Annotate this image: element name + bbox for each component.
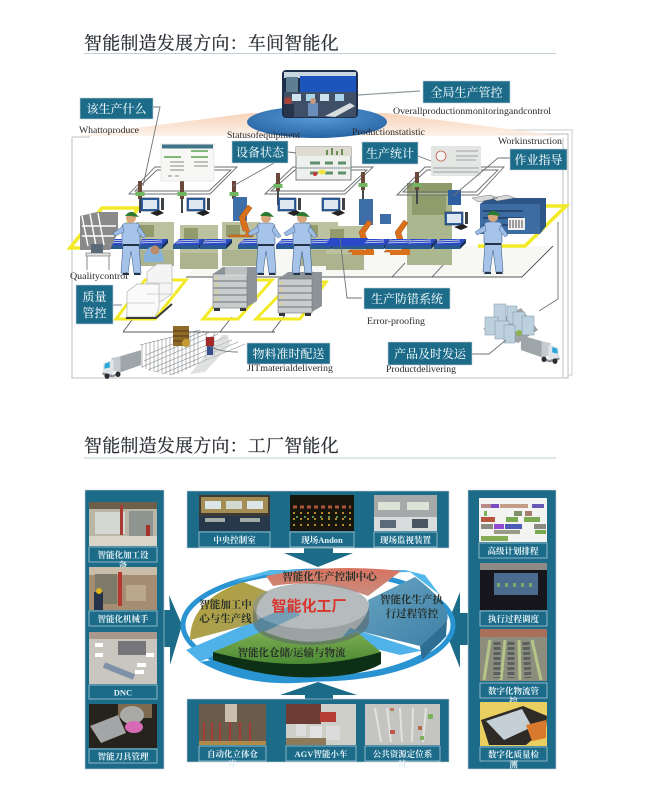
label: central control room: 中央控制室 xyxy=(213,535,256,545)
factory line artwork xyxy=(70,167,566,375)
panel: right planning xyxy=(468,490,556,770)
photo: site monitoring xyxy=(374,495,437,531)
caption: product delivering: Productdelivering xyxy=(386,365,456,375)
photo: machining equipment xyxy=(89,502,157,546)
photo: robot arm xyxy=(89,567,157,610)
segment: warehouse and logistics xyxy=(213,631,381,677)
label: logistics management: 控 xyxy=(509,696,518,706)
machine towers xyxy=(233,197,247,221)
arrow: bottom panel to centre xyxy=(280,682,357,700)
label: machining centre xyxy=(199,598,252,625)
material handler xyxy=(206,337,214,346)
callout: equipment status xyxy=(232,141,288,163)
inner light-blue bands xyxy=(186,570,450,683)
label: advanced scheduling xyxy=(479,543,547,558)
delivery truck left xyxy=(103,350,141,379)
photo: central control room xyxy=(199,495,270,531)
photo: automated warehouse xyxy=(199,704,266,745)
panel: bottom logistics xyxy=(187,699,449,769)
photo: resource location map xyxy=(365,704,440,745)
finished goods buildings xyxy=(483,308,538,343)
factory diagram xyxy=(85,490,556,770)
photo: scheduling gantt xyxy=(479,498,547,542)
yellow floor zones xyxy=(70,208,138,248)
label: site monitoring xyxy=(374,532,437,547)
label: advanced scheduling: 高级计划排程 xyxy=(487,546,539,556)
outer ring xyxy=(183,571,453,679)
callout: work instruction xyxy=(510,149,567,170)
segment: machining centre xyxy=(190,582,268,640)
callout: JIT material delivery xyxy=(247,343,330,364)
callout: production statistics xyxy=(362,142,418,164)
arrow: right panel to centre xyxy=(445,592,469,668)
panel: left equipment xyxy=(85,490,164,769)
photo: DNC screen xyxy=(89,632,157,684)
label: automated warehouse xyxy=(199,746,266,769)
label: machining equipment: 备 xyxy=(119,560,128,570)
caption: production statistic: Productionstatistic xyxy=(352,128,425,138)
caption: error proofing: Error-proofing xyxy=(367,316,425,327)
label: machining centre: 智能加工中 xyxy=(199,598,252,611)
label: execution process control: 行过程管控 xyxy=(386,607,439,620)
panel: stacked paper frame xyxy=(72,130,572,378)
label: execution process control xyxy=(380,593,443,620)
label: central control room xyxy=(199,532,270,547)
label: resource location: 统 xyxy=(398,759,407,769)
callout: error proofing xyxy=(364,288,450,309)
label: resource location: 公共资源定位系 xyxy=(373,749,433,759)
title: workshop intelligence: 智能制造发展方向：车间智能化 xyxy=(84,34,339,54)
label: machining equipment: 智能化加工设 xyxy=(97,550,149,560)
storage rack xyxy=(480,204,540,234)
photo: execution dispatch screen xyxy=(480,563,547,610)
label: machining centre: 心与生产线 xyxy=(199,612,252,625)
label: warehouse logistics: 智能化仓储/运输与物流 xyxy=(238,646,346,659)
label: automated warehouse: 库 xyxy=(228,759,237,769)
workshop diagram xyxy=(70,70,572,379)
callout: overall production control: 全局生产管控 xyxy=(430,84,503,100)
caption: status of equipment: Statusofequipment xyxy=(227,130,300,141)
label: logistics management xyxy=(480,683,547,706)
material carts xyxy=(213,267,257,311)
label: robot arm xyxy=(89,611,157,626)
callout: production statistics: 生产统计 xyxy=(366,146,414,160)
segment: production control centre xyxy=(266,568,401,596)
callout: equipment status: 设备状态 xyxy=(236,144,285,160)
callout: product delivery: 产品及时发运 xyxy=(394,346,467,361)
material grid racks xyxy=(140,330,245,375)
callout: quality control: 质量 xyxy=(82,289,107,304)
photo: tool management xyxy=(89,704,157,748)
callout: error proofing: 生产防错系统 xyxy=(371,291,444,306)
white goods stack xyxy=(126,264,172,318)
label: intelligent factory: 智能化工厂 xyxy=(271,597,347,615)
callout: quality control: 管控 xyxy=(82,305,107,320)
label: andon xyxy=(290,532,354,547)
label: AGV cart: AGV智能小车 xyxy=(295,749,348,759)
photo: andon board xyxy=(290,495,354,531)
label: AGV cart xyxy=(286,746,356,761)
label: quality inspection: 测 xyxy=(509,760,518,770)
callout: overall production control xyxy=(423,81,510,103)
control centre platform with photo xyxy=(247,70,387,138)
workers xyxy=(113,211,508,275)
callout: quality control xyxy=(76,285,113,324)
label: resource location xyxy=(365,746,440,769)
callout: product delivery xyxy=(388,342,472,365)
caption: work instruction: Workinstruction xyxy=(498,137,562,147)
segment: execution process control xyxy=(355,577,448,660)
arrow: left panel to centre xyxy=(163,595,182,665)
label: tool management xyxy=(89,749,157,763)
title: factory intelligence: 智能制造发展方向：工厂智能化 xyxy=(84,436,339,456)
label: DNC xyxy=(89,685,157,699)
callout: JIT material delivery: 物料准时配送 xyxy=(252,346,325,361)
label: machining equipment xyxy=(89,547,157,570)
panel: top control xyxy=(187,491,449,548)
floor xyxy=(186,246,553,277)
monitors xyxy=(141,198,164,216)
conveyor trays xyxy=(103,239,135,249)
callout: what to produce: 该生产什么 xyxy=(86,101,147,116)
andon lamps xyxy=(136,181,144,213)
label: quality inspection xyxy=(480,747,547,770)
label: quality inspection: 数字化质量检 xyxy=(488,750,539,760)
caption: overall production monitoring: Overallproductionmonitoringandcontrol xyxy=(393,107,551,117)
delivery truck right xyxy=(521,335,559,364)
photo: AGV cart xyxy=(286,704,356,745)
screen: equipment status xyxy=(296,147,351,180)
leader lines xyxy=(113,107,558,354)
photo: tablet quality check xyxy=(480,702,547,746)
light beam from control centre xyxy=(75,113,562,136)
label: execution dispatch xyxy=(480,611,547,626)
overhead table frames xyxy=(129,167,237,194)
label: andon: 现场Andon xyxy=(301,535,343,545)
label: logistics management: 数字化物流管 xyxy=(488,686,539,696)
photo: logistics aerial xyxy=(480,629,547,681)
robots xyxy=(228,205,253,237)
arrow: top panel to centre xyxy=(284,547,353,567)
label: automated warehouse: 自动化立体仓 xyxy=(207,749,258,759)
central ellipse diagram xyxy=(183,568,453,683)
caption: what to produce: Whattoproduce xyxy=(79,126,139,136)
callout: what to produce xyxy=(80,98,153,119)
label: robot arm: 智能化机械手 xyxy=(97,614,149,624)
centre cylinder xyxy=(253,583,369,645)
inspection station xyxy=(86,253,110,256)
label: production control centre: 智能化生产控制中心 xyxy=(282,570,378,583)
label: DNC: DNC xyxy=(114,688,132,698)
caption: JIT material delivering: JITmaterialdelivering xyxy=(247,364,333,374)
connector: control centre to callout xyxy=(358,91,420,95)
label: execution process control: 智能化生产执 xyxy=(380,593,443,606)
seated inspector xyxy=(144,246,164,262)
label: tool management: 智能刀具管理 xyxy=(97,752,149,762)
label: site monitoring: 现场监视装置 xyxy=(380,535,431,545)
quality parts rack xyxy=(80,212,118,250)
label: execution dispatch: 执行过程调度 xyxy=(488,614,539,624)
screen: production instructions xyxy=(161,144,214,181)
benches xyxy=(136,222,174,266)
screen: production statistics xyxy=(431,146,481,176)
caption: quality control: Qualitycontrol xyxy=(70,272,128,282)
callout: work instruction: 作业指导 xyxy=(514,152,563,167)
